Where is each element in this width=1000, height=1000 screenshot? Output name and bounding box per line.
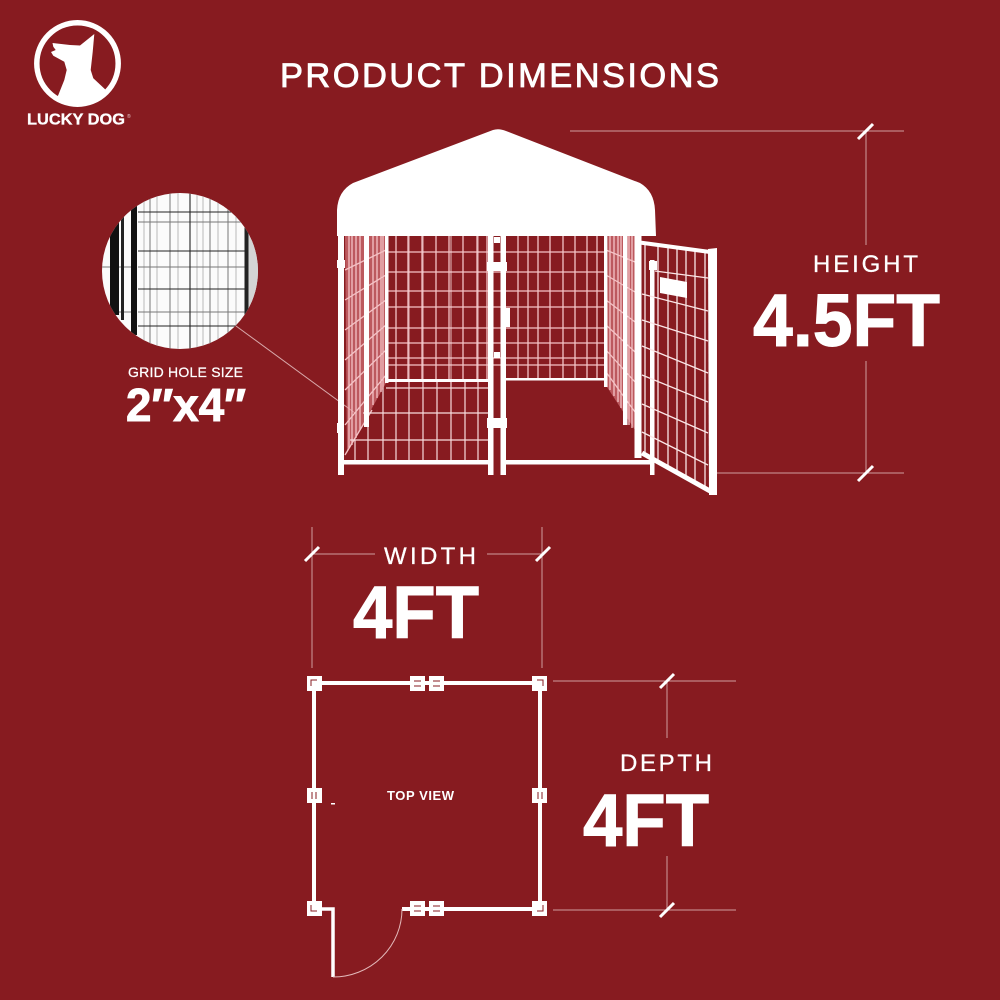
depth value: 4FT (583, 779, 709, 862)
floor plan door (320, 909, 333, 977)
floor plan walls (314, 683, 540, 909)
grid hole value: 2″x4″ (126, 379, 246, 431)
leader line from close-up to kennel (236, 326, 355, 413)
top view label: TOP VIEW (387, 788, 455, 803)
kennel frame (337, 235, 657, 475)
depth label: DEPTH (620, 750, 712, 777)
kennel front panel mesh (350, 236, 490, 462)
kennel side panel shading (345, 236, 386, 453)
grid hole close-up circle (100, 190, 260, 350)
logo wordmark: LUCKY DOG (27, 112, 125, 128)
height label: HEIGHT (813, 251, 918, 278)
kennel back and side mesh (345, 236, 635, 455)
logo: Lucky Dog (27, 23, 131, 128)
depth dimension lines (553, 674, 736, 917)
grid hole label: GRID HOLE SIZE (128, 364, 243, 380)
width value: 4FT (353, 571, 479, 654)
width dimension lines (305, 527, 550, 668)
kennel illustration (337, 129, 717, 495)
top view floor plan (307, 676, 547, 977)
kennel door (636, 242, 717, 495)
height value: 4.5FT (753, 279, 940, 362)
icon: dog silhouette (51, 34, 106, 102)
floor plan posts (307, 676, 547, 916)
kennel roof canopy (337, 129, 656, 236)
door swing arc (333, 909, 402, 977)
width label: WIDTH (384, 543, 476, 570)
registered mark: ® (127, 113, 131, 120)
height dimension lines (570, 124, 904, 481)
title: PRODUCT DIMENSIONS (280, 57, 719, 95)
